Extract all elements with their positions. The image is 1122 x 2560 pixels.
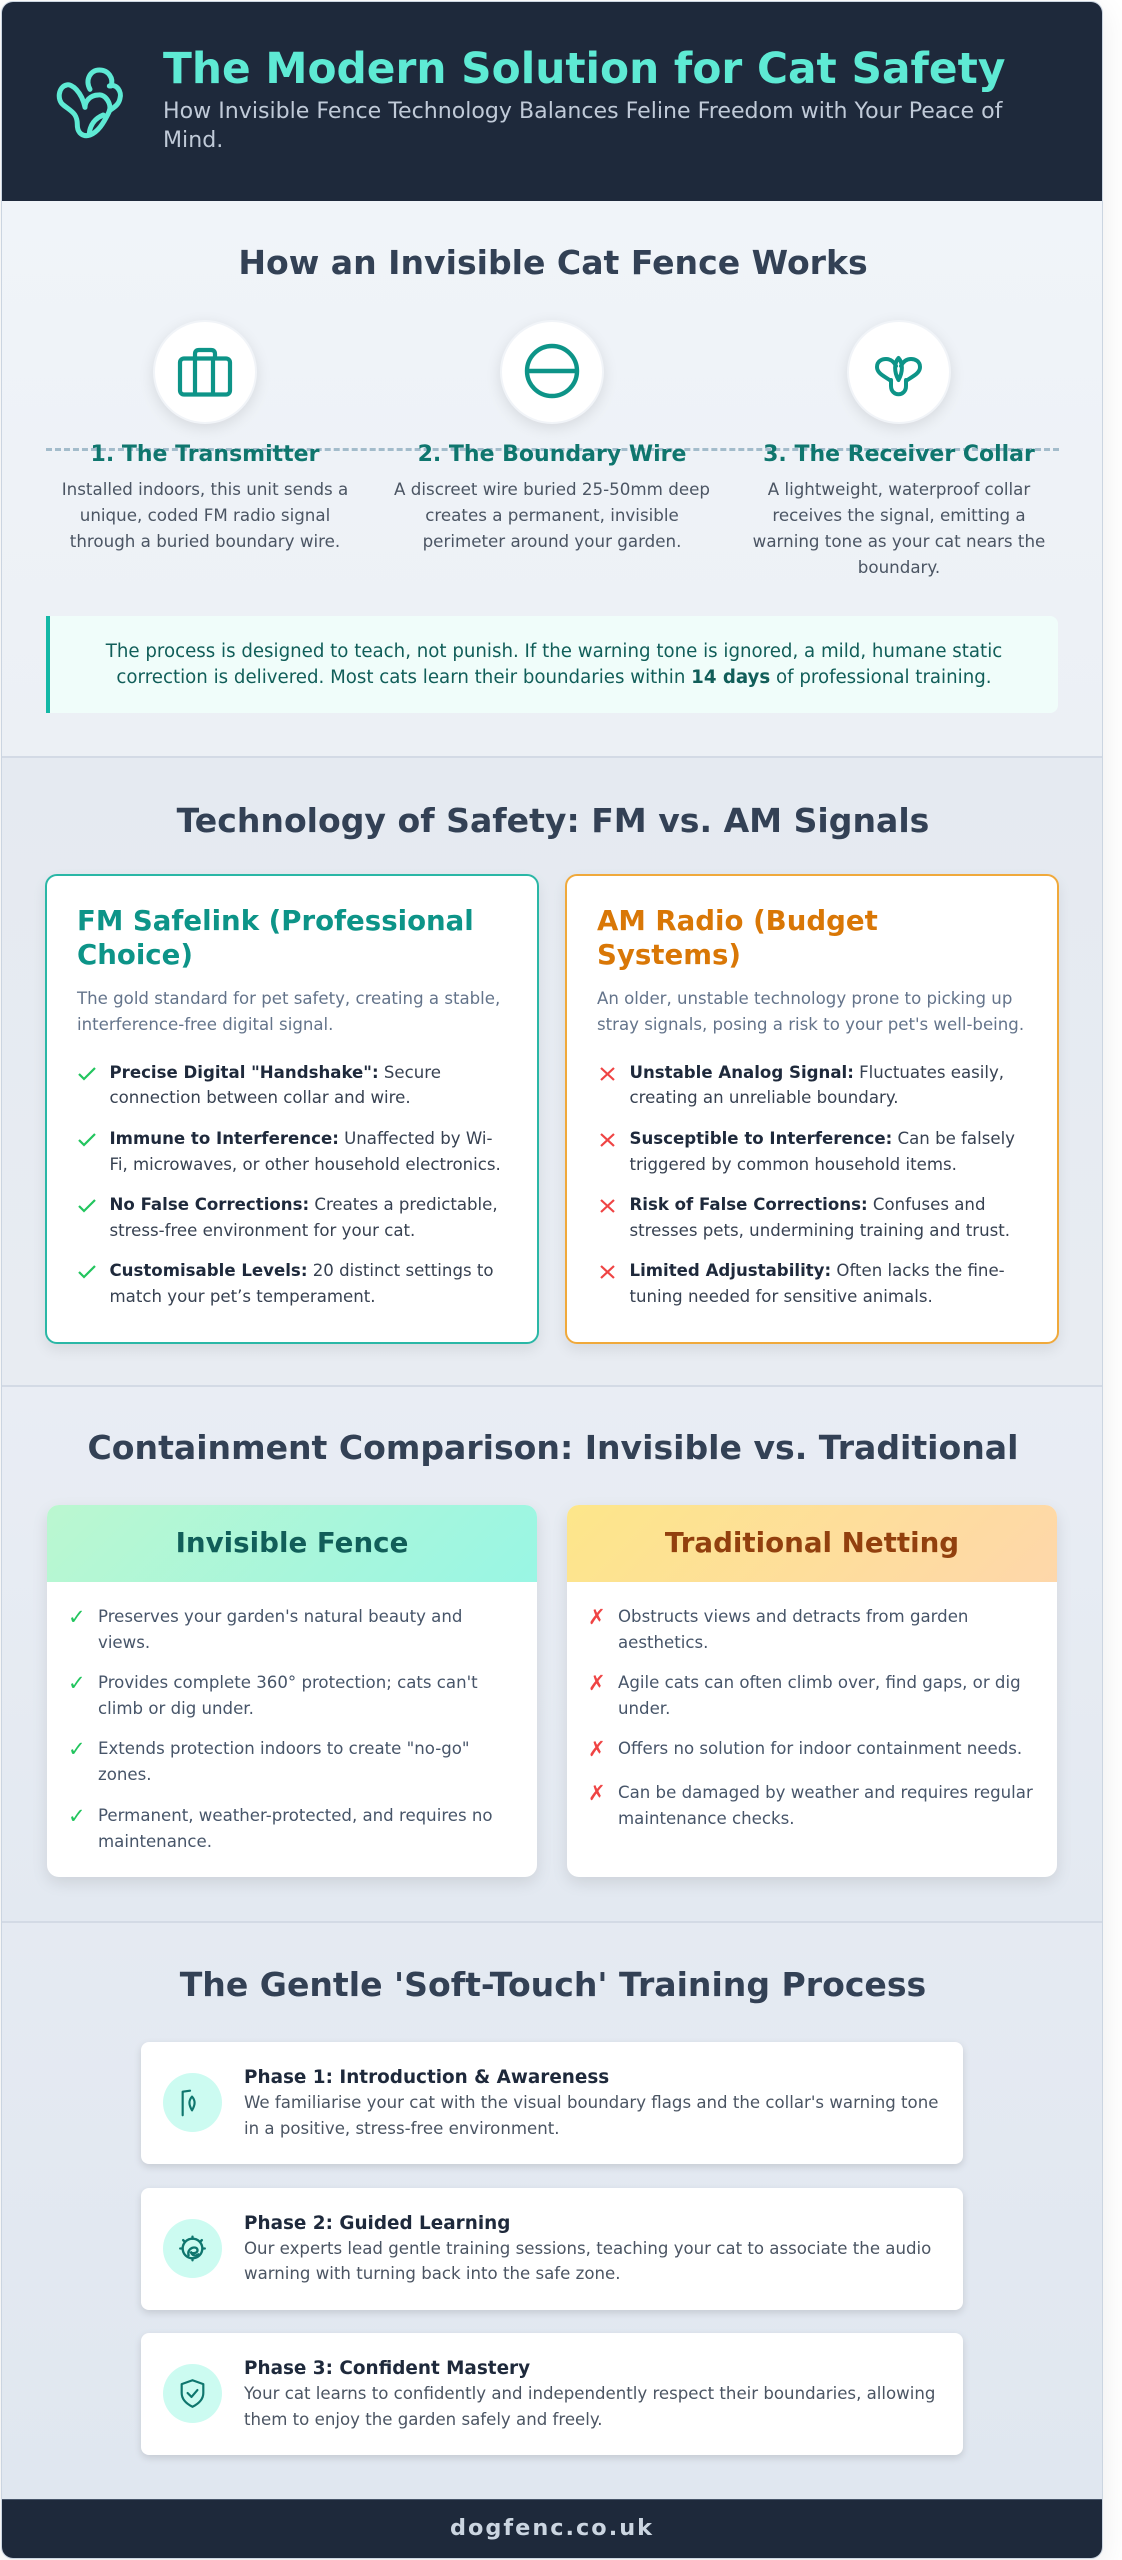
card: FM Safelink: [45, 874, 539, 1344]
panel: FM vs AM: [0, 756, 1106, 1387]
FM item 2: Immune to Interference: Unaffected by Wi-: [110, 1129, 493, 1148]
step 1 text: Installed indoors, this unit sends a: [62, 479, 348, 499]
list item: maintenance checks.: [618, 1809, 794, 1828]
icon: boundary wire: [500, 320, 604, 424]
step 2 text: perimeter around your garden.: [423, 531, 681, 551]
card: invisible fence: ✓: [68, 1671, 86, 1695]
step 3 title: 3. The Receiver Collar: [763, 442, 1035, 467]
traditional netting header: Traditional Netting: [665, 1526, 959, 1559]
icon: shield: [163, 2364, 222, 2423]
step 1 text: [62, 479, 348, 551]
FM item 3: stress-free environment for your cat.: [110, 1221, 415, 1240]
FM item 2: [78, 1129, 501, 1174]
AM item 2: triggered by common household items.: [630, 1155, 957, 1174]
list item: Extends protection indoors to create "no-go": [98, 1739, 470, 1758]
list item: under.: [618, 1699, 670, 1718]
card: AM Radio: [565, 874, 1059, 1344]
FM item 2: Fi, microwaves, or other household electronics.: [110, 1155, 501, 1174]
title: The Modern Solution for Cat Safety: [163, 44, 1005, 93]
list item: [68, 1671, 478, 1718]
step 3 text: receives the signal, emitting a: [772, 505, 1026, 525]
AM item 1: creating an unreliable boundary.: [630, 1088, 899, 1107]
FM item 3: No False Corrections: Creates a predictable,: [110, 1195, 498, 1214]
list item: maintenance.: [98, 1832, 212, 1851]
AM item 4: Limited Adjustability: Often lacks the fine-: [630, 1261, 1005, 1280]
card: invisible fence: ✓: [68, 1804, 86, 1828]
FM item 1: connection between collar and wire.: [110, 1088, 411, 1107]
list item: climb or dig under.: [98, 1699, 254, 1718]
AM card title: [597, 904, 878, 971]
FM card intro: The gold standard for pet safety, creating a stable,: [77, 989, 500, 1008]
list item: [588, 1605, 968, 1652]
FM item 4: Customisable Levels: 20 distinct settings to: [110, 1261, 494, 1280]
callout: correction is delivered. Most cats learn their boundaries within 14 days of professional training.: [116, 667, 992, 688]
AM item 4: [600, 1261, 1005, 1306]
step 2 text: [394, 479, 710, 551]
list item: Can be damaged by weather and requires regular: [618, 1783, 1033, 1802]
phase 2 card: [141, 2188, 963, 2310]
FM card intro: [76, 989, 500, 1034]
icon: cat paw logo: [56, 68, 123, 138]
icon: guided gear: [163, 2218, 222, 2278]
phase 2 text: Our experts lead gentle training sessions, teaching your cat to associate the audio: [244, 2238, 931, 2258]
list item: Provides complete 360° protection; cats can't: [98, 1673, 478, 1692]
step 1 text: through a buried boundary wire.: [70, 531, 340, 551]
phase 1 text: [244, 2093, 938, 2138]
icon: flag: [163, 2073, 222, 2132]
icon: transmitter: [153, 320, 257, 424]
heading: Containment Comparison: Invisible vs. Traditional: [88, 1428, 1018, 1467]
card: traditional netting: ✗: [588, 1737, 606, 1761]
list item: [588, 1781, 1033, 1828]
card: traditional netting: ✗: [588, 1605, 606, 1629]
dashed connector: [46, 448, 1059, 451]
icon: receiver collar: [847, 320, 951, 424]
list item: Permanent, weather-protected, and requires no: [98, 1806, 493, 1825]
list item: views.: [98, 1633, 150, 1652]
phase 2 title: Phase 2: Guided Learning: [244, 2212, 510, 2234]
callout: [46, 616, 1058, 713]
phase 1 text: in a positive, stress-free environment.: [244, 2119, 560, 2138]
FM card title: FM Safelink (Professional: [77, 904, 474, 937]
step 2 title: 2. The Boundary Wire: [418, 442, 686, 467]
AM item 4: tuning needed for sensitive animals.: [630, 1287, 933, 1306]
phase 3 text: them to enjoy the garden safely and freely.: [244, 2410, 603, 2429]
list item: [68, 1605, 462, 1652]
FM item 3: [78, 1195, 498, 1240]
step 3 text: [753, 479, 1045, 577]
AM item 3: stresses pets, undermining training and trust.: [630, 1221, 1010, 1240]
FM item 4: match your pet’s temperament.: [110, 1287, 376, 1306]
phase 1 text: We familiarise your cat with the visual boundary flags and the collar's warning tone: [244, 2093, 938, 2112]
phase 1 card: [141, 2042, 963, 2164]
card: traditional netting: ✗: [588, 1781, 606, 1805]
subtitle: Mind.: [163, 127, 223, 153]
AM item 1: [600, 1063, 1004, 1107]
phase 3 text: Your cat learns to confidently and independently respect their boundaries, allowing: [244, 2384, 935, 2403]
step 1 text: unique, coded FM radio signal: [80, 505, 330, 525]
list item: zones.: [98, 1765, 152, 1784]
callout: The process is designed to teach, not punish. If the warning tone is ignored, a mild, humane static: [106, 641, 1002, 662]
header band: [0, 0, 1106, 202]
invisible fence header: Invisible Fence: [176, 1526, 408, 1559]
heading: How an Invisible Cat Fence Works: [238, 243, 868, 282]
card: traditional netting: [567, 1505, 1057, 1877]
AM card intro: stray signals, posing a risk to your pet's well-being.: [597, 1015, 1024, 1034]
phase 2 text: [244, 2238, 931, 2283]
FM card intro: interference-free digital signal.: [77, 1015, 333, 1034]
list item: Obstructs views and detracts from garden: [618, 1607, 968, 1626]
footer: dogfenc.co.uk: [450, 2515, 654, 2541]
AM item 3: [600, 1195, 1010, 1240]
panel: containment comparison: [0, 1385, 1106, 1922]
panel: how it works: [0, 201, 1106, 757]
heading: The Gentle 'Soft-Touch' Training Process: [180, 1965, 926, 2004]
phase 1 title: Phase 1: Introduction & Awareness: [244, 2067, 609, 2088]
subtitle: [163, 98, 1003, 153]
traditional netting header: [567, 1505, 1057, 1582]
list item: [68, 1804, 493, 1851]
step 3 text: boundary.: [858, 557, 940, 577]
AM item 3: Risk of False Corrections: Confuses and: [630, 1195, 985, 1214]
step 2 text: creates a permanent, invisible: [425, 505, 679, 525]
FM item 4: [78, 1261, 494, 1306]
phase 3 title: Phase 3: Confident Mastery: [244, 2358, 530, 2379]
list item: Agile cats can often climb over, find gaps, or dig: [618, 1673, 1021, 1692]
subtitle: How Invisible Fence Technology Balances Feline Freedom with Your Peace of: [163, 98, 1002, 124]
AM item 2: [600, 1129, 1015, 1174]
AM card title: Systems): [597, 938, 741, 971]
panel: training process: [0, 1921, 1106, 2499]
step 2 text: A discreet wire buried 25-50mm deep: [394, 479, 710, 499]
card: invisible fence: ✓: [68, 1605, 86, 1629]
phase 2 text: warning with turning back into the safe zone.: [244, 2264, 620, 2283]
list item: [588, 1671, 1021, 1718]
card: traditional netting: ✗: [588, 1671, 606, 1695]
phase 3 card: [141, 2333, 963, 2455]
list item: aesthetics.: [618, 1633, 708, 1652]
phase 3 text: [244, 2384, 935, 2429]
FM card title: Choice): [77, 938, 193, 971]
AM item 2: Susceptible to Interference: Can be falsely: [630, 1129, 1015, 1148]
step 3 text: A lightweight, waterproof collar: [768, 479, 1030, 499]
card: invisible fence: [47, 1505, 537, 1877]
list item: Preserves your garden's natural beauty and: [98, 1607, 462, 1626]
list item: Offers no solution for indoor containment needs.: [618, 1739, 1022, 1758]
step 3 text: warning tone as your cat nears the: [753, 531, 1045, 551]
FM card title: [77, 904, 474, 971]
footer: [0, 2499, 1106, 2560]
AM card title: AM Radio (Budget: [597, 904, 878, 937]
AM item 1: Unstable Analog Signal: Fluctuates easily,: [630, 1063, 1004, 1082]
list item: [68, 1737, 470, 1784]
step 1 title: 1. The Transmitter: [91, 442, 319, 467]
FM item 1: Precise Digital "Handshake": Secure: [110, 1063, 441, 1082]
AM card intro: [597, 989, 1024, 1034]
heading: Technology of Safety: FM vs. AM Signals: [177, 801, 929, 840]
AM card intro: An older, unstable technology prone to picking up: [597, 989, 1012, 1008]
invisible fence header: [47, 1505, 537, 1582]
card: invisible fence: ✓: [68, 1737, 86, 1761]
FM item 1: [78, 1063, 441, 1107]
